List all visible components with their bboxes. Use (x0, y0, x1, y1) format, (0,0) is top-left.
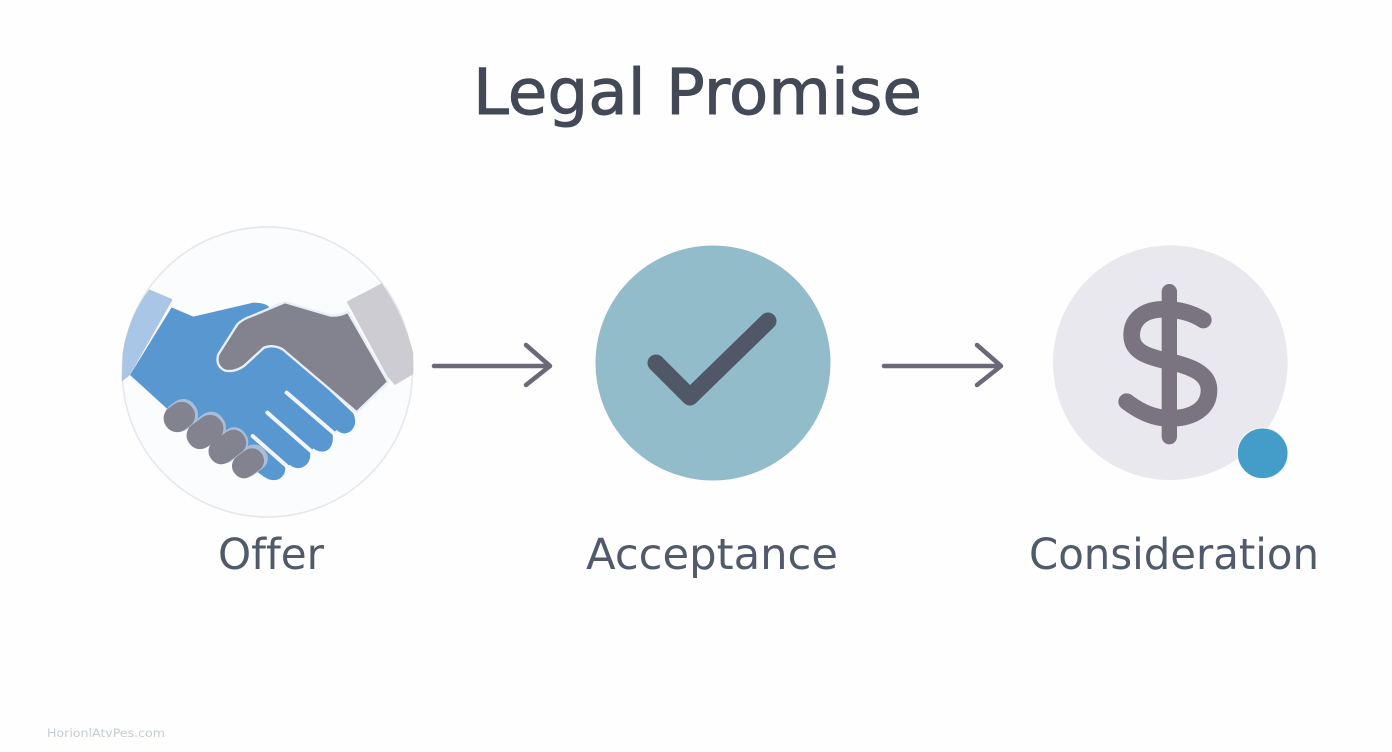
label: offer: Offer (218, 531, 325, 580)
title: Legal Promise (473, 56, 922, 129)
step 3: consideration (1029, 245, 1319, 580)
arrow: acceptance to consideration (884, 345, 1001, 385)
icon: handshake (122, 227, 413, 517)
circle background (122, 227, 412, 517)
arrow: offer to acceptance (434, 345, 550, 385)
gripping fingers (159, 397, 269, 483)
right hand (219, 303, 387, 411)
watermark: HorionlAtvPes.com (47, 726, 165, 740)
step 1: offer (122, 227, 413, 580)
left cuff (122, 289, 173, 382)
right cuff (347, 283, 413, 385)
label: acceptance: Acceptance (586, 531, 838, 580)
finger gaps (253, 393, 334, 466)
icon: dollar coin (1053, 245, 1288, 480)
left hand (130, 303, 355, 480)
accent dot (1237, 428, 1288, 479)
step 2: acceptance (586, 246, 838, 580)
finger outlines (159, 394, 273, 482)
label: consideration: Consideration (1029, 531, 1319, 580)
icon: check mark circle (596, 246, 830, 480)
